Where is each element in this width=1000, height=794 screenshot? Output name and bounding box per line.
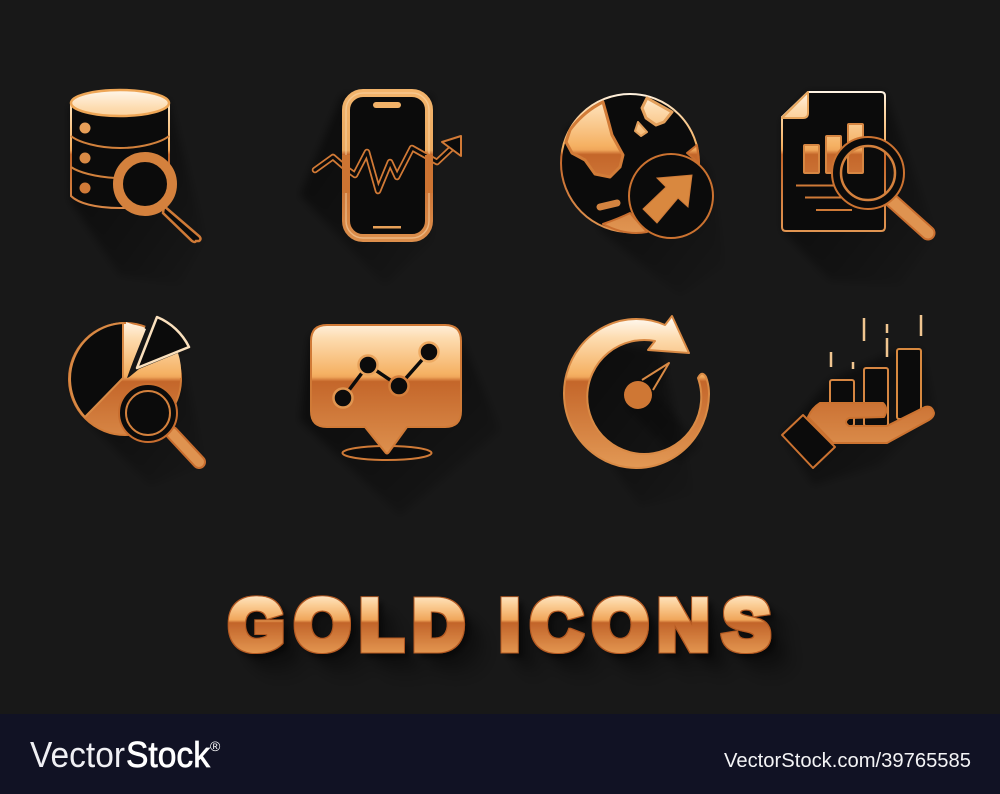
watermark logo — [30, 734, 221, 775]
icon: chart speech bubble pin — [300, 325, 500, 515]
title: GOLD ICONS — [229, 586, 770, 666]
watermark logo: Stock — [126, 734, 211, 775]
icon: pie chart with magnifier — [68, 317, 205, 485]
watermark logo: ® — [210, 738, 221, 754]
footer band — [0, 714, 1000, 794]
icon: hand holding growth chart — [782, 315, 935, 485]
icon: document with magnifier — [782, 92, 935, 285]
icon: speedometer with circular arrow — [564, 316, 709, 505]
icon: smartphone with rising chart — [300, 93, 461, 285]
watermark logo: Vector — [30, 734, 125, 775]
icon: database search — [70, 90, 205, 285]
image id URL: VectorStock.com/39765585 — [724, 750, 971, 772]
icon: globe with arrow — [561, 94, 725, 295]
